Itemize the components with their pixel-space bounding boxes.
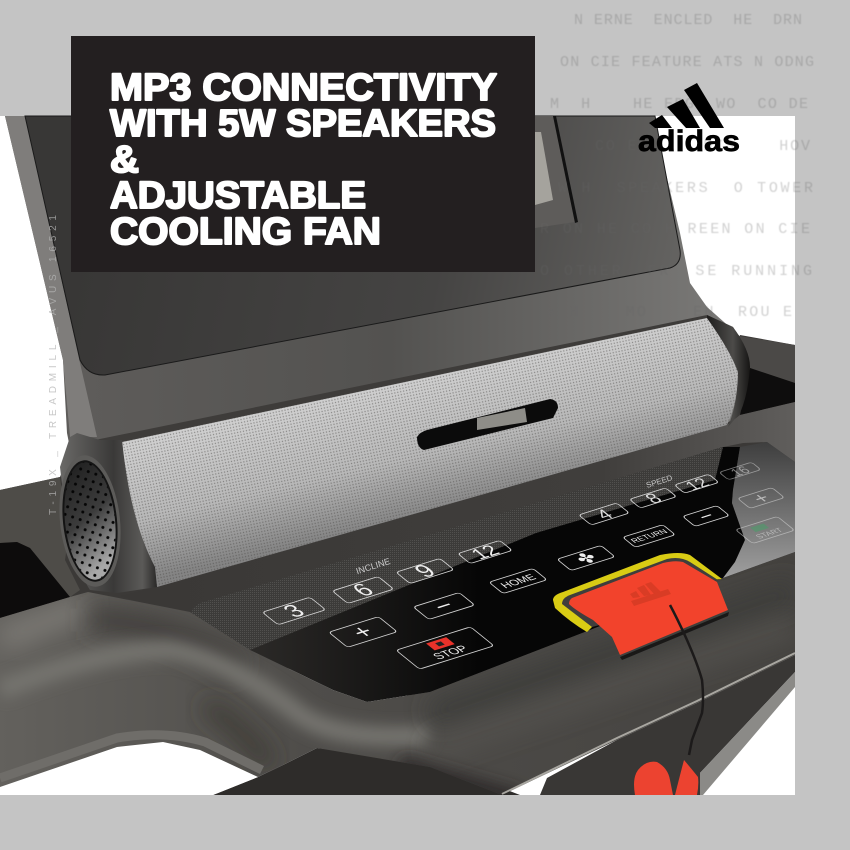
control buttons [260,461,795,669]
left edge highlight [5,116,97,437]
white photo panel [0,116,795,795]
red safety key [634,760,698,795]
speaker grille [122,318,738,587]
title line 1: MP3 CONNECTIVITY [110,67,497,109]
textured strip on panel [190,447,723,650]
ghost line 8: W H MO EN ROU E [547,304,792,321]
display window [535,116,578,228]
ghost line 4: CO EN HIS HOV [595,138,810,155]
clip embossed logo [630,582,671,606]
button: incline 3: 3 [278,601,311,622]
left deck surface [0,477,80,597]
ghost line 2: ON CIE FEATURE ATS N ODNG [560,54,814,71]
button: speed plus: + [748,490,776,507]
title line 2: WITH 5W SPEAKERS [110,103,496,145]
right deck surface [733,335,795,383]
ghost typewriter text [540,12,814,321]
vertical product label: T-19X _ TREADMILL _ AVUS 16521 [48,215,59,515]
button: fan: ✤ [571,550,603,568]
button: minus: − [426,595,462,617]
clip shadow [620,612,729,660]
button: minus [410,590,478,622]
label: incline: INCLINE [355,556,391,576]
band between speaker and panel [120,402,795,617]
button: return [623,525,675,547]
title text [110,67,497,253]
title line 5: COOLING FAN [110,211,381,253]
button: speed 4: 4 [592,507,619,523]
under-handle frame left [213,748,520,795]
button: incline 12 [456,539,515,566]
dark screen panel [25,116,680,375]
button: speed 12: 12 [681,476,714,493]
button: incline 12: 12 [467,542,505,563]
button: speed 8 [628,487,680,511]
button: speed 16 [718,461,762,481]
title line 3: & [110,139,139,181]
speaker centre slot [417,399,558,450]
button: speed 8: 8 [641,491,667,507]
ghost line 3: M H HE EDGE WO CO DE [550,96,808,113]
red safety clip [569,561,728,655]
button: incline 6 [330,575,397,606]
button: home: HOME [498,573,539,590]
button: stop [396,627,494,669]
logo wordmark: adidas [638,125,740,158]
button: speed 12 [673,473,722,496]
title box [71,36,535,272]
console bezel [5,116,750,600]
title line 4: ADJUSTABLE [110,175,366,217]
left cup holder [0,542,70,618]
black control panel [193,447,745,702]
right speaker cap [707,315,750,427]
button: speed minus: − [693,508,721,525]
treadmill console photo [0,116,800,800]
button: speed 16: 16 [726,464,754,478]
button: plus: + [345,621,381,643]
lower deck frame [0,335,795,700]
glass reflection at right [723,442,795,578]
safety clip housing [553,553,729,660]
button: incline 6: 6 [347,580,380,601]
button: speed minus [681,504,733,529]
left speaker cap [53,433,157,593]
ghost line 6: R ON HE CO H REEN ON CIE [540,221,810,238]
ghost line 1: N ERNE ENCLED HE DRN [574,12,802,29]
right tray opening [740,368,795,415]
light frame strut [700,672,795,795]
safety cord [670,605,703,755]
lower frame below handle [540,655,795,795]
logo stripes [649,83,724,128]
white cut-out bottom left [0,742,258,795]
button: start: START [754,527,785,540]
button: home [489,568,547,594]
button: incline 9: 9 [409,561,442,582]
button: speed plus [736,486,788,511]
label: speed: SPEED [645,473,674,490]
button: start [735,516,795,544]
button: speed 4 [578,502,632,528]
ghost line 5: W H SPEAKERS O TOWER [558,180,813,197]
adidas logo [638,83,740,158]
button: stop: STOP [430,643,471,662]
button: return: RETURN [628,528,670,544]
button: incline 9 [393,556,458,587]
speaker roll top band [95,315,745,460]
button: fan [557,545,617,572]
button: incline 3 [260,595,329,627]
button: plus [327,615,399,649]
ghost line 7: O OTHER FR SE RUNNING [540,263,812,280]
front handle [0,540,800,800]
